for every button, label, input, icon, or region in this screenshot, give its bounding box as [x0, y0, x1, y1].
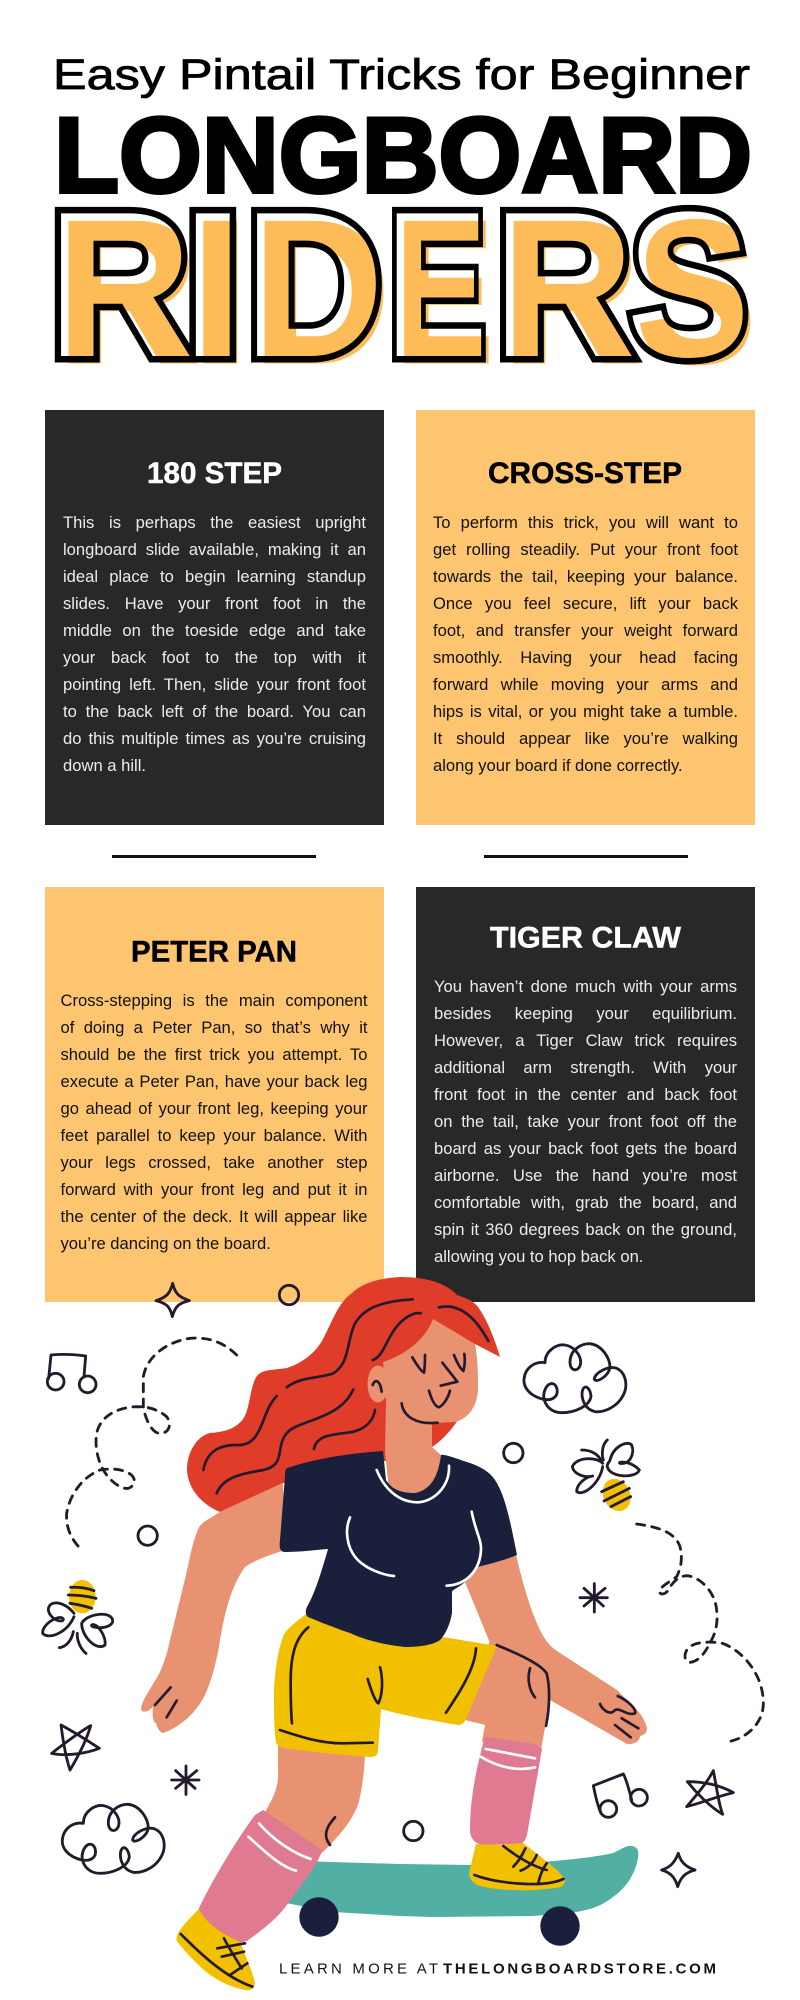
- right arm: [465, 1555, 647, 1744]
- text: Tiger Claw body: spin it 360 degrees back on the ground,: [434, 1220, 737, 1239]
- text: Tiger Claw body: However, a Tiger Claw trick requires: [434, 1031, 737, 1050]
- text: 180 Step body: longboard slide available, making it an: [63, 540, 366, 559]
- text: Cross-Step body: hips is vital, or you might take a tumble.: [433, 702, 738, 721]
- left arm: [141, 1483, 285, 1733]
- text: Peter Pan body: feet parallel to keep your balance. With: [60, 1126, 368, 1145]
- text: Peter Pan body: Cross-stepping is the main component: [60, 991, 368, 1010]
- text: Tiger Claw body: additional arm strength. With your: [434, 1058, 737, 1077]
- shoe laces: [181, 1846, 563, 1987]
- text: 180 Step body: do this multiple times as you’re cruising: [63, 729, 366, 748]
- text: Peter Pan body: go ahead of your front leg, keeping your: [60, 1099, 368, 1118]
- left thigh: [265, 1745, 365, 1853]
- right sock: [470, 1737, 542, 1845]
- icon: bee right: [572, 1440, 639, 1516]
- text: Tiger Claw body: allowing you to hop back on.: [434, 1247, 643, 1266]
- title outline: RIDERS: R: [51, 173, 189, 396]
- shorts: [274, 1613, 497, 1757]
- face features: [402, 1354, 465, 1423]
- panel: Tiger Claw: [416, 887, 755, 1302]
- text: Tiger Claw body: comfortable with, grab the board, and: [434, 1193, 737, 1212]
- footer: learn more: LEARN MORE AT: [279, 1960, 438, 1977]
- heading: TIGER CLAW: TIGER CLAW: [490, 922, 682, 954]
- icon: sparkle right: [662, 1853, 695, 1887]
- text: Cross-Step body: foot, and transfer your weight forward: [433, 621, 738, 640]
- heading: 180 STEP: 180 STEP: [147, 457, 282, 490]
- icon: cloud left: [62, 1804, 164, 1873]
- text: Cross-Step body: [433, 513, 738, 775]
- title outline: RIDERS: D: [247, 172, 381, 396]
- text: Cross-Step body: Once you feel secure, lift your back: [433, 594, 738, 613]
- icon: circle left: [138, 1526, 157, 1545]
- text: Cross-Step body: smoothly. Having your head facing: [433, 648, 738, 667]
- sock stripes: [248, 1749, 535, 1871]
- panel: 180 Step: [45, 410, 384, 825]
- title fill: RIDERS orange: [58, 179, 755, 404]
- title outline: RIDERS: R: [496, 174, 631, 397]
- heading: PETER PAN: PETER PAN: [131, 936, 297, 968]
- text: 180 Step body: ideal place to begin learning standup: [63, 567, 366, 586]
- skateboard: [270, 1846, 638, 1946]
- shorts lines and hand: [155, 1627, 638, 1845]
- title block: [53, 51, 755, 400]
- text: 180 Step body: down a hill.: [63, 756, 146, 775]
- title line: Easy Pintail Tricks: Easy Pintail Tricks for Beginner: [53, 51, 750, 99]
- divider right: [484, 855, 688, 858]
- text: Cross-Step body: along your board if done correctly.: [433, 756, 683, 775]
- icon: music note left: [47, 1354, 96, 1393]
- icon: circle right: [504, 1443, 523, 1463]
- dashed flight path left: [67, 1338, 237, 1550]
- linework on figure: [155, 1299, 638, 1987]
- divider left: [112, 855, 316, 858]
- icon: star left: [52, 1725, 99, 1770]
- text: Tiger Claw body: airborne. Use the hand you’re most: [434, 1166, 737, 1185]
- icon: bee left: [43, 1580, 113, 1653]
- icon: music note right: [593, 1774, 647, 1817]
- icon: cloud right: [524, 1344, 626, 1413]
- panel: Cross-Step: [416, 410, 755, 825]
- shirt highlights: [347, 1466, 481, 1586]
- text: Cross-Step body: towards the tail, keeping your balance.: [433, 567, 738, 586]
- title outline: RIDERS: E: [389, 172, 485, 396]
- text: Peter Pan body: you’re dancing on the board.: [60, 1234, 271, 1253]
- text: 180 Step body: [63, 513, 366, 775]
- heading: CROSS-STEP: CROSS-STEP: [488, 457, 682, 490]
- doodles left: [43, 1283, 299, 1873]
- text: Cross-Step body: get rolling steadily. Put your front foot: [433, 540, 738, 559]
- text: Tiger Claw body: You haven’t done much with your arms: [434, 977, 737, 996]
- icon: sparkle top: [156, 1283, 189, 1317]
- text: Peter Pan body: your legs crossed, take another step: [60, 1153, 368, 1172]
- neck and face: [368, 1319, 478, 1500]
- text: Tiger Claw body: besides keeping your equilibrium.: [434, 1004, 737, 1023]
- hair: [187, 1277, 500, 1512]
- footer: learn more: THELONGBOARDSTORE.COM: [443, 1960, 716, 1977]
- text: 180 Step body: pointing left. Then, slide your front foot: [63, 675, 366, 694]
- left shoe: [177, 1909, 255, 1990]
- text: Peter Pan body: forward with your front leg and put it in: [60, 1180, 368, 1199]
- text: Tiger Claw body: board as your back foot gets the board: [434, 1139, 737, 1158]
- title fill: RIDERS orange: R: [503, 181, 639, 400]
- text: Cross-Step body: forward while moving your arms and: [433, 675, 738, 694]
- text: Tiger Claw body: front foot in the center and back foot: [434, 1085, 737, 1104]
- title fill: RIDERS orange: R: [58, 180, 197, 400]
- panel: Peter Pan: [45, 887, 384, 1302]
- text: Peter Pan body: should be the first trick you attempt. To: [60, 1045, 368, 1064]
- title fill: RIDERS orange: E: [396, 180, 492, 400]
- icon: asterisk left: [172, 1766, 199, 1794]
- shirt: [280, 1451, 517, 1647]
- title outline: RIDERS: I: [185, 174, 241, 396]
- left sock: [199, 1810, 322, 1942]
- doodles right: [404, 1344, 763, 1887]
- hair strands: [203, 1299, 488, 1493]
- text: Tiger Claw body: on the tail, take your front foot off the: [434, 1112, 737, 1131]
- text: Tiger Claw body: [434, 977, 737, 1266]
- text: 180 Step body: slides. Have your front foot in the: [63, 594, 366, 613]
- footer: learn more: [279, 1960, 716, 1977]
- dashed flight path right: [637, 1524, 763, 1742]
- text: 180 Step body: This is perhaps the easiest upright: [63, 513, 366, 532]
- text: Peter Pan body: [60, 991, 368, 1253]
- title fill: RIDERS orange: D: [254, 180, 389, 400]
- title outline: RIDERS: [54, 204, 748, 364]
- title line: LONGBOARD: LONGBOARD: [54, 95, 752, 215]
- text: Peter Pan body: execute a Peter Pan, have your back leg: [60, 1072, 368, 1091]
- text: Cross-Step body: To perform this trick, you will want to: [433, 513, 738, 532]
- icon: circle top: [279, 1285, 299, 1305]
- icon: circle lower: [404, 1821, 423, 1841]
- icon: star right: [687, 1771, 733, 1814]
- text: 180 Step body: middle on the toeside edge and take: [63, 621, 366, 640]
- title outline: RIDERS: S: [630, 172, 747, 396]
- text: 180 Step body: to the back left of the board. You can: [63, 702, 366, 721]
- text: Cross-Step body: It should appear like you’re walking: [433, 729, 738, 748]
- title fill: RIDERS orange: S: [638, 179, 755, 400]
- text: 180 Step body: your back foot to the top with it: [63, 648, 366, 667]
- right thigh: [465, 1640, 550, 1750]
- text: Peter Pan body: of doing a Peter Pan, so that’s why it: [60, 1018, 368, 1037]
- icon: asterisk right: [580, 1584, 607, 1612]
- text: Peter Pan body: the center of the deck. It will appear like: [60, 1207, 368, 1226]
- right shoe: [469, 1843, 565, 1890]
- title fill: RIDERS orange: I: [192, 181, 248, 400]
